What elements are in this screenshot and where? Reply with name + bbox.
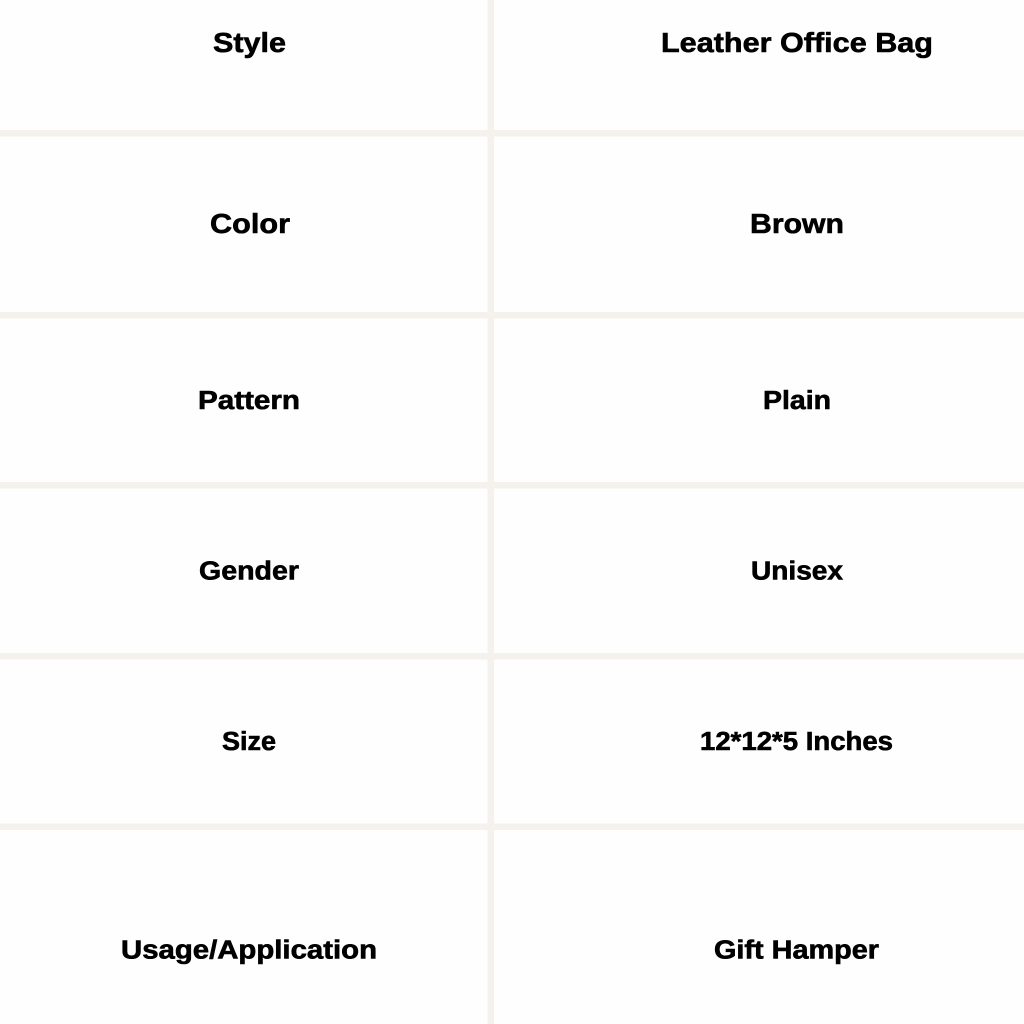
row: gender xyxy=(199,558,843,586)
value: brown: Brown xyxy=(750,208,844,239)
row: usage xyxy=(121,936,879,964)
value: gift hamper: Gift Hamper xyxy=(714,936,879,964)
row: style xyxy=(213,27,933,58)
label: size: Size xyxy=(222,728,276,756)
label: usage/application: Usage/Application xyxy=(121,936,377,964)
row: size xyxy=(222,728,893,756)
label: color: Color xyxy=(210,208,290,239)
value: dimensions: 12*12*5 Inches xyxy=(700,728,893,756)
value: leather office bag: Leather Office Bag xyxy=(661,27,933,58)
label: style: Style xyxy=(213,27,286,58)
label: pattern: Pattern xyxy=(198,387,300,415)
value: plain: Plain xyxy=(763,387,831,415)
row: pattern xyxy=(198,387,831,415)
value: unisex: Unisex xyxy=(751,558,843,586)
row: color xyxy=(210,208,844,239)
label: gender: Gender xyxy=(199,558,299,586)
